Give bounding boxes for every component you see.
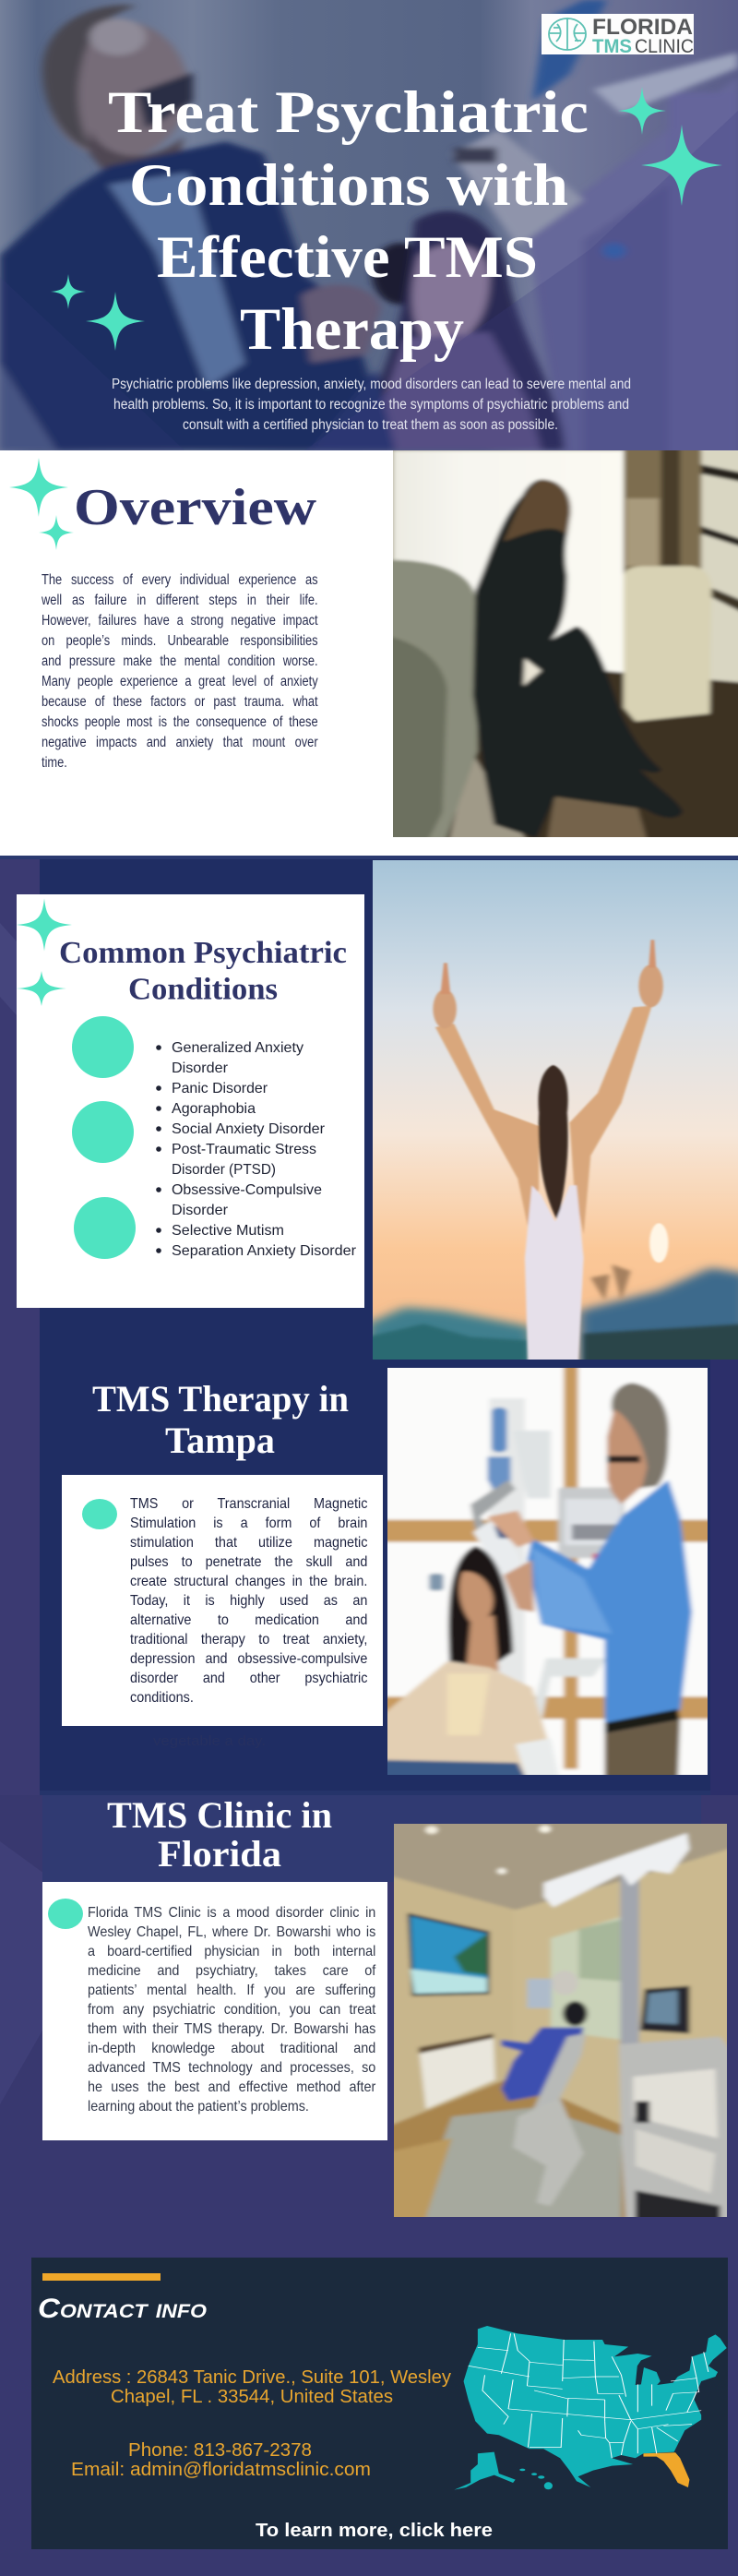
- photo: woman with thumbs up at sunset: [367, 860, 738, 1370]
- text: overview paragraph: However, failures have a strong negative impact: [42, 613, 318, 628]
- panel: conditions card: [17, 894, 364, 1308]
- man: shirt: [527, 1480, 692, 1723]
- panel: conditions background: [0, 856, 738, 1795]
- panel: tms therapy card: [62, 1475, 383, 1726]
- monitor: [558, 1488, 625, 1558]
- text: overview paragraph: and pressure make the mental condition worse.: [42, 653, 318, 668]
- title: [108, 79, 589, 363]
- text: overview paragraph: [42, 572, 318, 770]
- hero subtitle: consult with a certified physician to treat them as soon as possible.: [183, 417, 558, 433]
- text: tms therapy paragraph: Stimulation is a form of brain: [130, 1516, 367, 1531]
- hero subtitle: health problems. So, it is important to recognize the symptoms of psychiatric problems and: [113, 397, 629, 413]
- heading: tms clinic in florida: TMS Clinic in: [107, 1794, 332, 1836]
- heading: common psychiatric conditions: Conditions: [128, 973, 278, 1006]
- right machine panels: [527, 77, 738, 461]
- floor: [394, 2080, 627, 2217]
- text: overview paragraph: on people’s minds. Unbearable responsibilities: [42, 633, 318, 648]
- text: overview paragraph: Many people experience a great level of anxiety: [42, 674, 318, 689]
- logo: TMS: [592, 36, 632, 57]
- silhouette: [473, 479, 683, 838]
- list: conditions: Disorder: [172, 1060, 229, 1076]
- list: conditions: Disorder (PTSD): [172, 1162, 276, 1178]
- small monitor: [527, 1979, 552, 2008]
- heading: tms clinic in florida: [107, 1794, 332, 1875]
- list: conditions: Agoraphobia: [172, 1101, 256, 1117]
- heading: tms therapy in tampa: TMS Therapy in: [92, 1378, 349, 1420]
- cabinet: [419, 2033, 495, 2109]
- column and magstim arm: [620, 1874, 639, 2046]
- logo: FLORIDA: [592, 15, 693, 40]
- arms: [435, 1024, 539, 1235]
- text: overview paragraph: The success of every individual experience as: [42, 572, 318, 587]
- text: clinic paragraph: [88, 1905, 376, 2115]
- icon: teal circles: [72, 1016, 136, 1259]
- phone and email: Email: admin@floridatmsclinic.com: [71, 2460, 371, 2480]
- title: Treat Psychiatric: [108, 79, 589, 146]
- text: clinic paragraph: them with their TMS therapy. Dr. Bowarshi has: [88, 2021, 375, 2037]
- tank top: [525, 1185, 584, 1370]
- hero subtitle: [112, 377, 631, 433]
- icon: conditions sparkles: [17, 899, 72, 1006]
- photo: woman sitting by bed: [376, 443, 738, 849]
- text: clinic paragraph: a board-certified physician in both internal: [88, 1944, 375, 1959]
- panel: clinic card: [42, 1882, 387, 2140]
- panel: clinic section band: [40, 1791, 710, 1882]
- text: clinic paragraph: Florida TMS Clinic is a mood disorder clinic in: [88, 1905, 375, 1921]
- address: Address : 26843 Tanic Drive., Suite 101, Wesley: [53, 2367, 451, 2388]
- text: tms therapy paragraph: Today, it is highly used as an: [130, 1593, 367, 1609]
- phone and email: [71, 2440, 371, 2480]
- fists and thumbs: [433, 989, 457, 1029]
- text: tms therapy paragraph: pulses to penetrate the skull and: [130, 1554, 367, 1570]
- text: clinic paragraph: he uses the best and effective method after: [88, 2079, 375, 2095]
- heading: tms therapy in tampa: [92, 1378, 349, 1461]
- text: overview paragraph: negative impacts and anxiety that mount over: [42, 735, 318, 749]
- headrest and woman: [372, 243, 428, 305]
- list: conditions: Post-Traumatic Stress: [172, 1142, 316, 1157]
- text: clinic paragraph: advanced TMS technology and processes, so: [88, 2060, 375, 2076]
- text: tms therapy paragraph: alternative to medication and: [130, 1612, 367, 1628]
- phone and email: Phone: 813-867-2378: [128, 2440, 312, 2461]
- text: clinic paragraph: from any psychiatric condition, you can treat: [88, 2002, 375, 2018]
- icon: brain: [549, 18, 586, 50]
- title: Therapy: [240, 296, 464, 363]
- heading: tms clinic in florida: Florida: [158, 1833, 281, 1875]
- logo: CLINIC: [635, 36, 694, 57]
- text: tms therapy paragraph: [130, 1496, 367, 1706]
- chair: [501, 2040, 530, 2054]
- lights: [425, 1826, 437, 1834]
- address: [53, 2367, 451, 2407]
- man head: [47, 20, 188, 159]
- window: [551, 1917, 621, 2040]
- list: conditions: Disorder: [172, 1203, 229, 1218]
- logo: [542, 14, 694, 57]
- faint text under card: vegetable a day.: [153, 1733, 266, 1749]
- woman: [448, 1546, 513, 1668]
- text: tms therapy paragraph: TMS or Transcranial Magnetic: [130, 1496, 367, 1512]
- list: conditions: Social Anxiety Disorder: [172, 1121, 326, 1137]
- text: clinic paragraph: patients’ mental health. If you are suffering: [88, 1983, 375, 1998]
- panel: contact info: [31, 2258, 728, 2549]
- title: Effective TMS: [157, 224, 538, 291]
- list: conditions: Generalized Anxiety: [172, 1040, 304, 1056]
- device tower: [616, 2036, 727, 2217]
- machine: [489, 1397, 528, 1683]
- heading: overview: Overview: [74, 479, 317, 536]
- list: conditions: Separation Anxiety Disorder: [172, 1243, 357, 1259]
- text: clinic paragraph: in-depth knowledge about traditional and: [88, 2041, 375, 2056]
- text: tms therapy paragraph: depression and obsessive-compulsive: [130, 1651, 367, 1667]
- icon: hero sparkles: [51, 87, 722, 351]
- tv: [408, 1913, 490, 1996]
- title: Conditions with: [129, 152, 568, 219]
- map: united states with florida highlighted: [454, 2326, 727, 2490]
- text: clinic paragraph: Wesley Chapel, FL, where Dr. Bowarshi who is: [88, 1924, 375, 1940]
- text: tms therapy paragraph: stimulation that utilize magnetic: [130, 1535, 367, 1551]
- heading: common psychiatric conditions: [59, 936, 347, 1006]
- list: conditions: Panic Disorder: [172, 1081, 268, 1096]
- address: Chapel, FL . 33544, United States: [111, 2387, 393, 2407]
- text: overview paragraph: time.: [42, 755, 67, 770]
- text: tms therapy paragraph: traditional therapy to treat anxiety,: [130, 1632, 367, 1647]
- list: conditions: Obsessive-Compulsive: [172, 1182, 322, 1198]
- list: conditions: Selective Mutism: [172, 1223, 284, 1239]
- photo: tms clinic room: [394, 1824, 727, 2217]
- icon: teal dot: [48, 1899, 83, 1929]
- man: hair head: [612, 1383, 669, 1489]
- text: clinic paragraph: learning about the patient’s problems.: [88, 2099, 309, 2115]
- hero subtitle: Psychiatric problems like depression, anxiety, mood disorders can lead to severe mental and: [112, 377, 631, 392]
- hand: [302, 284, 381, 363]
- icon: overview sparkles: [9, 458, 74, 550]
- text: overview paragraph: shocks people most is the consequence of these: [42, 714, 318, 729]
- panel: hero photo background: [0, 0, 738, 461]
- coil: [554, 1972, 576, 1994]
- text: overview paragraph: well as failure in different steps in their life.: [42, 593, 318, 607]
- text: tms therapy paragraph: create structural changes in the brain.: [130, 1574, 367, 1589]
- heading: common psychiatric conditions: Common Psychiatric: [59, 936, 347, 970]
- text: clinic paragraph: medicine and psychiatry, takes care of: [88, 1963, 375, 1979]
- text: tms therapy paragraph: disorder and other psychiatric: [130, 1671, 367, 1686]
- call to action: To learn more, click here: [256, 2521, 493, 2541]
- icon: teal dot: [82, 1499, 117, 1529]
- text: tms therapy paragraph: conditions.: [130, 1690, 194, 1706]
- suit: [0, 141, 390, 450]
- heading: contact info: Contact info: [38, 2294, 207, 2324]
- man: hands: [487, 1511, 534, 1548]
- accent bar: [42, 2273, 161, 2281]
- photo: doctor and patient with tms machine: [376, 1363, 716, 1781]
- text: overview paragraph: because of these factors or past trauma. what: [42, 694, 318, 709]
- hair: [539, 1065, 568, 1222]
- panel: overview background: [0, 450, 738, 857]
- monitor: [640, 1986, 689, 2033]
- heading: tms therapy in tampa: Tampa: [165, 1420, 275, 1461]
- list: conditions: [156, 1040, 357, 1259]
